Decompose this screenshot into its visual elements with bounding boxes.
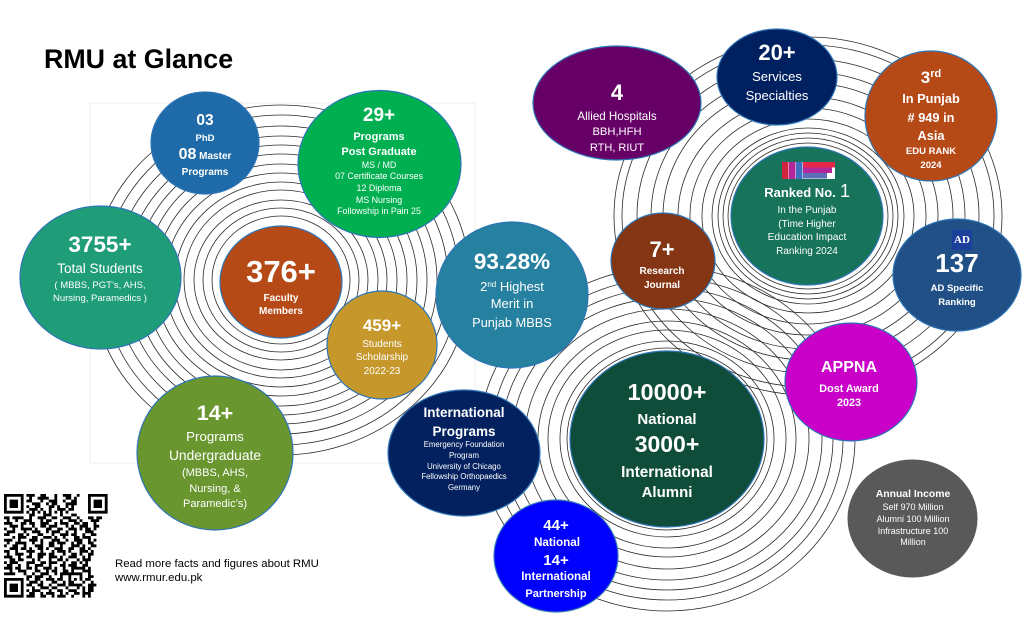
panel: APPNA award: [785, 323, 917, 441]
panel: Punjab and Asia rank: 3: [921, 68, 930, 87]
panel: PhD and master programs: 08 Master: [179, 146, 232, 163]
icon: THE rankings logo: [782, 162, 835, 179]
panel: allied hospitals: [533, 46, 701, 160]
panel: APPNA award: APPNA: [821, 359, 877, 376]
panel: alumni: [570, 351, 764, 527]
panel: post graduate programs: 29+: [363, 105, 395, 126]
panel: students scholarship: 459+: [363, 316, 401, 335]
panel: merit: 2: [480, 279, 487, 294]
panel: total students: Nursing, Paramedics ): [53, 293, 147, 304]
panel: allied hospitals: BBH,HFH: [592, 126, 642, 138]
panel: research journal: 7+: [649, 237, 675, 262]
panel: merit: 93.28%: [474, 249, 550, 274]
panel: students scholarship: Scholarship: [356, 352, 409, 363]
panel: students scholarship: 2022-23: [364, 366, 401, 377]
panel: annual income: Alumni 100 Million: [876, 514, 950, 524]
panel: THE ranking: Ranked No.: [764, 185, 836, 200]
panel: AD specific ranking: AD Specific: [931, 283, 983, 294]
panel: undergraduate programs: Programs: [186, 429, 244, 444]
panel: faculty members: Faculty: [263, 293, 299, 304]
panel: partnerships: 14+: [543, 552, 569, 569]
panel: Punjab and Asia rank: rd: [930, 68, 941, 80]
panel: annual income: [848, 460, 978, 578]
panel: APPNA award: 2023: [837, 397, 861, 409]
panel: total students: [20, 206, 181, 349]
panel: Punjab and Asia rank: EDU RANK: [906, 146, 956, 157]
panel: PhD and master programs: PhD: [196, 133, 215, 144]
panel: Punjab and Asia rank: 2024: [920, 160, 942, 171]
panel: partnerships: 44+: [543, 517, 569, 534]
panel: post graduate programs: 07 Certificate Courses: [335, 171, 423, 181]
panel: services specialties: Specialties: [746, 88, 809, 103]
panel: AD specific ranking: [893, 219, 1021, 331]
panel: alumni: 3000+: [635, 431, 699, 457]
panel: Punjab and Asia rank: Asia: [917, 128, 945, 143]
panel: services specialties: 20+: [758, 40, 796, 65]
panel: international programs: Program: [449, 451, 479, 460]
panel: faculty members: Members: [259, 306, 303, 317]
panel: post graduate programs: Followship in Pain 25: [337, 206, 421, 216]
panel: undergraduate programs: (MBBS, AHS,: [182, 467, 248, 479]
panel: PhD and master programs: Programs: [182, 167, 229, 178]
panel: annual income: Self 970 Million: [882, 502, 944, 512]
panel: annual income: Million: [900, 537, 926, 547]
panel: research journal: [611, 213, 715, 309]
panel: undergraduate programs: [137, 376, 293, 530]
panel: merit: [436, 222, 588, 368]
panel: undergraduate programs: 14+: [197, 401, 233, 425]
panel: international programs: Emergency Foundation: [424, 440, 504, 449]
panel: merit: Highest: [496, 279, 544, 294]
panel: post graduate programs: MS Nursing: [356, 195, 402, 205]
panel: partnerships: National: [534, 536, 580, 549]
panel: PhD and master programs: 03: [196, 112, 214, 129]
panel: THE ranking: Education Impact: [768, 232, 847, 243]
panel: total students: 3755+: [68, 232, 132, 257]
panel: Punjab and Asia rank: # 949 in: [908, 110, 955, 125]
text block: read more: Read more facts and figures about RMU: [115, 558, 319, 570]
panel: undergraduate programs: Undergraduate: [169, 448, 261, 463]
panel: international programs: [388, 390, 540, 516]
panel: alumni: National: [637, 411, 697, 428]
panel: APPNA award: Dost Award: [819, 383, 879, 395]
panel: international programs: Germany: [448, 483, 480, 492]
panel: post graduate programs: MS / MD: [362, 160, 396, 170]
panel: international programs: Fellowship Orthopaedics: [421, 472, 507, 481]
text block: read more: [114, 558, 319, 584]
panel: THE ranking: [731, 147, 883, 285]
panel: annual income: Infrastructure 100: [878, 526, 948, 536]
panel: AD specific ranking: Ranking: [938, 297, 976, 308]
panel: merit: Punjab MBBS: [472, 315, 552, 330]
panel: allied hospitals: RTH, RIUT: [590, 142, 644, 154]
panel: partnerships: Partnership: [525, 588, 587, 600]
panel: international programs: Programs: [432, 424, 496, 439]
panel: alumni: Alumni: [642, 484, 692, 501]
panel: services specialties: [717, 29, 837, 125]
panel: total students: ( MBBS, PGT’s, AHS,: [54, 280, 146, 291]
panel: international programs: International: [423, 405, 505, 420]
panel: Punjab and Asia rank: [865, 51, 997, 181]
panel: students scholarship: Students: [362, 339, 402, 350]
panel: research journal: Research: [639, 266, 685, 277]
panel: allied hospitals: 4: [611, 80, 624, 105]
panel: merit: nd: [487, 280, 496, 289]
panel: undergraduate programs: Paramedic’s): [183, 498, 247, 510]
panel: students scholarship: [327, 291, 437, 399]
panel: undergraduate programs: Nursing, &: [189, 483, 241, 495]
title: RMU at Glance: [44, 44, 233, 74]
panel: AD specific ranking: 137: [935, 248, 979, 278]
panel: international programs: University of Chicago: [427, 462, 501, 471]
panel: post graduate programs: [298, 90, 461, 238]
panel: THE ranking: In the Punjab: [778, 205, 837, 216]
panel: partnerships: [494, 500, 618, 612]
panel: THE ranking: (Time Higher: [778, 219, 836, 230]
panel: total students: Total Students: [57, 261, 143, 276]
panel: faculty members: 376+: [246, 254, 316, 289]
panel: alumni: 10000+: [627, 379, 707, 405]
panel: services specialties: Services: [752, 69, 802, 84]
icon: AD logo: AD: [954, 234, 970, 246]
panel: faculty members: [220, 226, 342, 338]
icon: QR code: [4, 494, 108, 598]
text block: read more: www.rmur.edu.pk: [114, 572, 203, 584]
panel: PhD and master programs: [151, 92, 259, 194]
panel: post graduate programs: Post Graduate: [341, 146, 417, 158]
panel: THE ranking: Ranking 2024: [776, 246, 838, 257]
panel: annual income: Annual Income: [876, 489, 950, 500]
panel: allied hospitals: Allied Hospitals: [577, 110, 657, 123]
panel: post graduate programs: 12 Diploma: [357, 183, 402, 193]
panel: partnerships: International: [521, 570, 591, 583]
panel: alumni: International: [621, 464, 713, 481]
panel: Punjab and Asia rank: In Punjab: [902, 91, 960, 106]
panel: merit: Merit in: [491, 296, 533, 311]
panel: research journal: Journal: [644, 280, 680, 291]
panel: THE ranking: 1: [840, 181, 850, 201]
panel: post graduate programs: Programs: [353, 131, 405, 143]
